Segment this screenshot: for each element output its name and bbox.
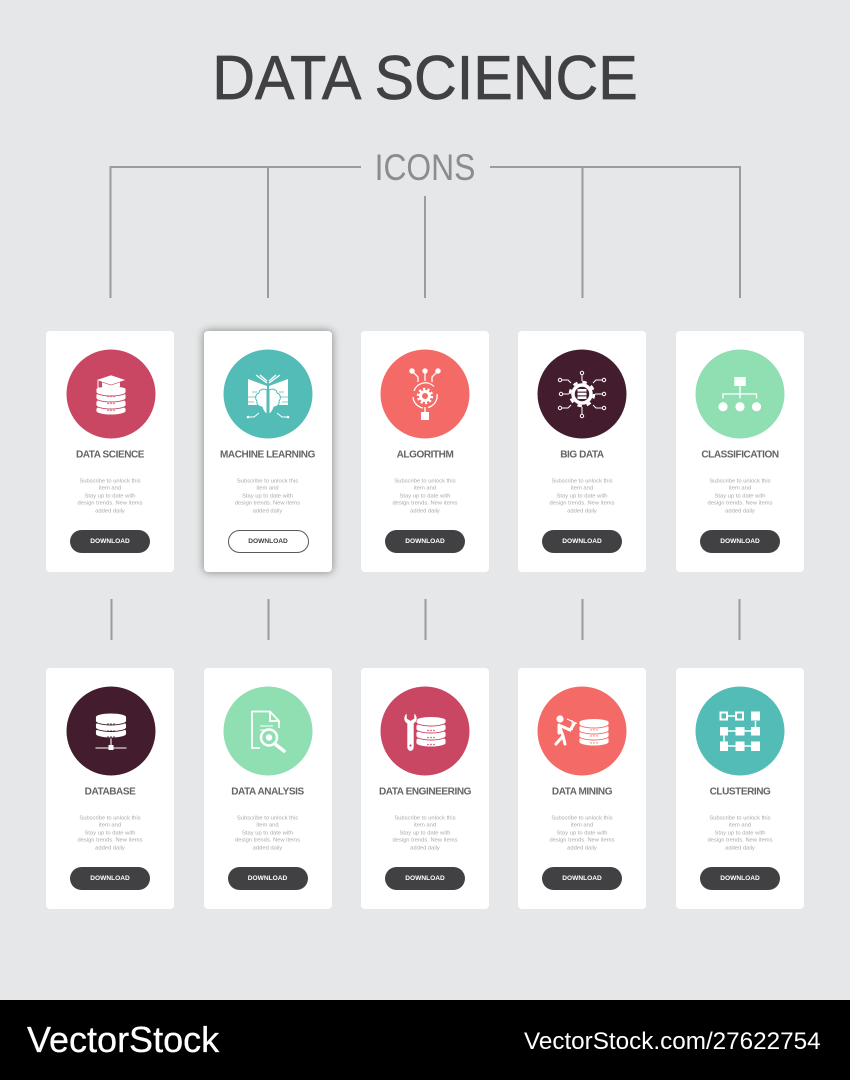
description: design trends. New items xyxy=(235,838,300,844)
label: DATABASE xyxy=(85,786,135,798)
description: item and xyxy=(414,823,436,829)
card: big data xyxy=(518,331,646,572)
button: DOWNLOAD xyxy=(90,875,130,882)
card: data analysis xyxy=(204,668,332,909)
button xyxy=(542,530,622,553)
icon: wrench and database xyxy=(380,686,470,776)
description: Subscribe to unlock this xyxy=(394,816,456,822)
description: added daily xyxy=(410,508,440,514)
description: Stay up to date with xyxy=(85,830,135,836)
icon: gear with circuit nodes xyxy=(538,350,626,438)
button xyxy=(700,530,780,553)
description xyxy=(77,816,143,851)
button: DOWNLOAD xyxy=(562,538,602,545)
description: design trends. New items xyxy=(77,501,143,507)
button: DOWNLOAD xyxy=(248,875,287,882)
button xyxy=(542,867,622,890)
connector lines xyxy=(110,166,741,640)
card: data engineering xyxy=(361,668,489,909)
description: item and xyxy=(414,486,436,492)
description: added daily xyxy=(725,508,755,514)
card: database xyxy=(46,668,174,909)
description: added daily xyxy=(725,845,755,851)
footer image id: VectorStock.com/27622754 xyxy=(524,1028,821,1055)
button: DOWNLOAD xyxy=(562,875,602,882)
button: DOWNLOAD xyxy=(720,875,760,882)
button: DOWNLOAD xyxy=(90,538,130,545)
button xyxy=(228,867,308,890)
description: design trends. New items xyxy=(549,501,615,507)
icon: document with magnifier xyxy=(224,686,312,776)
description: design trends. New items xyxy=(549,838,615,844)
button: DOWNLOAD xyxy=(405,538,445,545)
card: algorithm xyxy=(361,331,489,572)
description: added daily xyxy=(253,508,282,514)
description: design trends. New items xyxy=(235,501,300,507)
description: added daily xyxy=(567,845,597,851)
description: Subscribe to unlock this xyxy=(709,478,771,484)
description: design trends. New items xyxy=(392,838,458,844)
card: clustering xyxy=(676,668,804,909)
description: Stay up to date with xyxy=(400,493,450,499)
description: item and xyxy=(99,823,121,829)
label: DATA ENGINEERING xyxy=(379,786,471,798)
card: machine learning (highlighted) xyxy=(204,331,332,572)
description xyxy=(707,816,773,851)
button xyxy=(385,530,465,553)
description xyxy=(235,478,300,514)
card: classification xyxy=(676,331,804,572)
description: item and xyxy=(729,486,751,492)
footer bar xyxy=(0,1000,850,1080)
button xyxy=(385,867,465,890)
description: Subscribe to unlock this xyxy=(79,478,141,484)
description: Subscribe to unlock this xyxy=(551,816,613,822)
description: Stay up to date with xyxy=(242,493,293,499)
description xyxy=(392,816,458,851)
icon: book and brain xyxy=(224,350,312,438)
icon: cluster blocks xyxy=(696,686,784,776)
button xyxy=(70,867,150,890)
button xyxy=(70,530,150,553)
description: Subscribe to unlock this xyxy=(394,478,456,484)
label: BIG DATA xyxy=(560,450,604,460)
description xyxy=(549,816,615,851)
description: added daily xyxy=(567,508,597,514)
description: added daily xyxy=(95,845,125,851)
button xyxy=(700,867,780,890)
description: design trends. New items xyxy=(77,838,143,844)
button: DOWNLOAD xyxy=(720,538,760,545)
description xyxy=(235,816,300,851)
button: outlined: DOWNLOAD xyxy=(248,538,288,545)
icon: miner and database xyxy=(538,686,626,776)
description: item and xyxy=(729,823,751,829)
description: Stay up to date with xyxy=(557,830,607,836)
description: item and xyxy=(256,823,279,829)
description: design trends. New items xyxy=(707,838,773,844)
description: Subscribe to unlock this xyxy=(709,816,771,822)
description: item and xyxy=(99,486,121,492)
label: ALGORITHM xyxy=(397,450,453,460)
card: data mining xyxy=(518,668,646,909)
label: MACHINE LEARNING xyxy=(220,450,315,460)
description: Stay up to date with xyxy=(242,830,293,836)
subtitle: icons: ICONS xyxy=(375,146,475,188)
description: Stay up to date with xyxy=(715,830,765,836)
icon: gear algorithm xyxy=(380,350,470,438)
description xyxy=(77,478,143,514)
description: Stay up to date with xyxy=(85,493,135,499)
description xyxy=(707,478,773,514)
label: CLUSTERING xyxy=(710,786,770,798)
description xyxy=(549,478,615,514)
button: outlined xyxy=(228,530,308,553)
title: DATA SCIENCE xyxy=(212,44,638,113)
description: item and xyxy=(571,823,593,829)
description: Subscribe to unlock this xyxy=(79,816,141,822)
icon: graduation cap on database xyxy=(66,350,156,438)
icon: hierarchy xyxy=(696,350,784,438)
description: added daily xyxy=(253,845,282,851)
footer logo: VectorStock xyxy=(27,1019,219,1060)
label: DATA ANALYSIS xyxy=(231,786,304,798)
button: DOWNLOAD xyxy=(405,875,445,882)
description: design trends. New items xyxy=(707,501,773,507)
icon: networked database xyxy=(66,686,156,776)
description: added daily xyxy=(410,845,440,851)
description: added daily xyxy=(95,508,125,514)
card: data science xyxy=(46,331,174,572)
description xyxy=(392,478,458,514)
label: DATA MINING xyxy=(552,786,612,798)
label: CLASSIFICATION xyxy=(701,450,779,460)
description: Subscribe to unlock this xyxy=(237,816,298,822)
description: item and xyxy=(571,486,593,492)
label: DATA SCIENCE xyxy=(76,450,144,460)
description: design trends. New items xyxy=(392,501,458,507)
description: Stay up to date with xyxy=(557,493,607,499)
description: Subscribe to unlock this xyxy=(551,478,613,484)
description: Subscribe to unlock this xyxy=(237,478,298,484)
description: Stay up to date with xyxy=(715,493,765,499)
description: item and xyxy=(256,486,279,492)
description: Stay up to date with xyxy=(400,830,450,836)
